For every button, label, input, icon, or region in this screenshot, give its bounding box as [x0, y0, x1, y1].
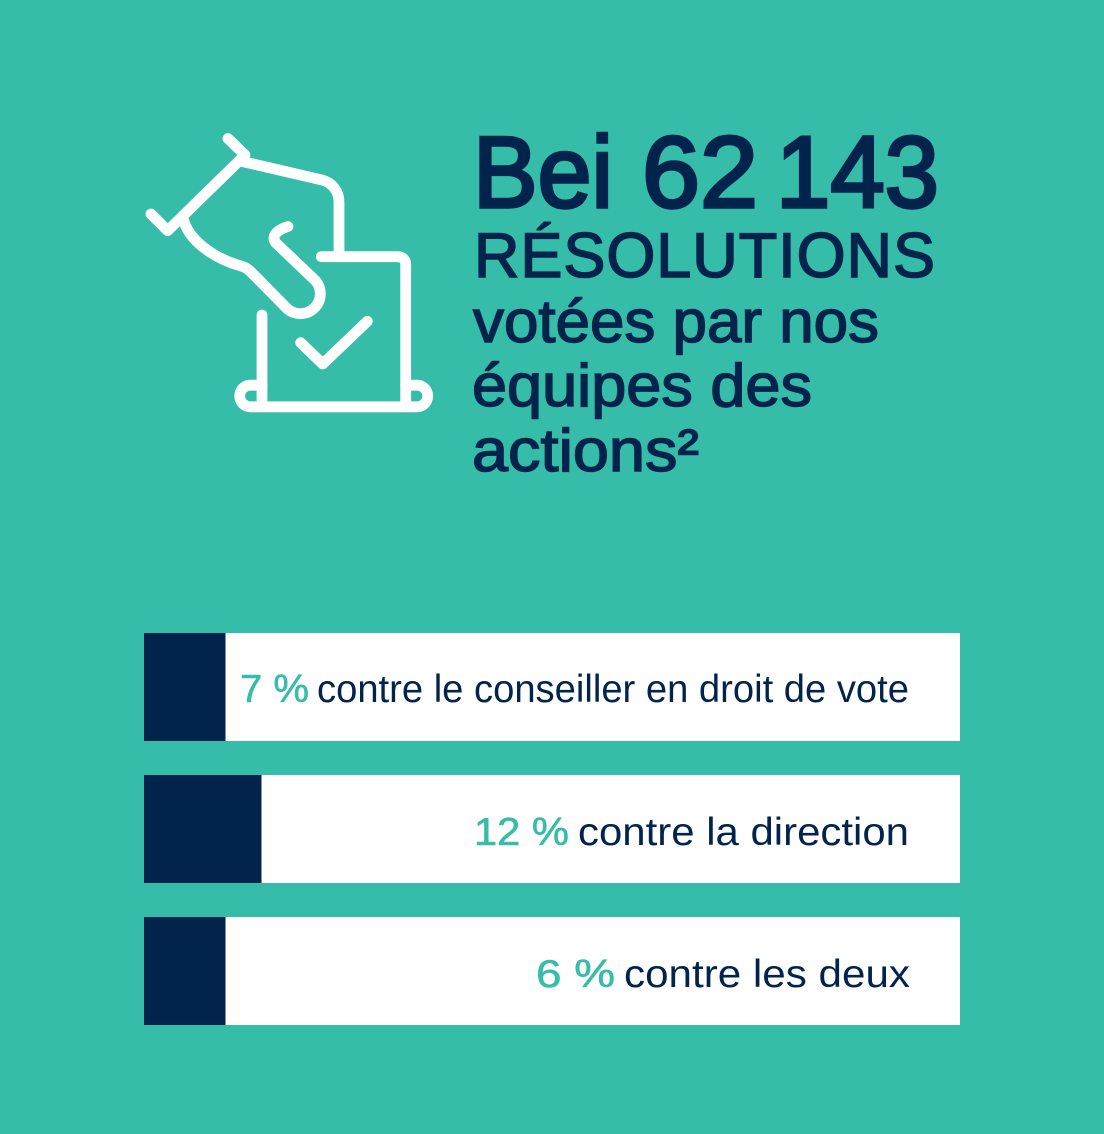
- label: 12 %: 12 %: [474, 811, 569, 854]
- label: contre le conseiller en droit de vote: contre le conseiller en droit de vote: [317, 668, 909, 711]
- bar: 6 % against both: [144, 917, 960, 1025]
- label: contre la direction: contre la direction: [578, 811, 909, 854]
- heading: key figure: [473, 117, 939, 229]
- label: 7 %: 7 %: [240, 668, 309, 711]
- heading: description line 1: votées par nos: [473, 288, 879, 355]
- icon: check mark: [301, 321, 367, 364]
- heading: description line 2: équipes des: [472, 352, 812, 419]
- heading: key figure: 143: [776, 117, 939, 229]
- heading: key figure: Bei: [473, 117, 613, 229]
- bar: 12 % against management: [144, 775, 960, 883]
- label: 6 %: 6 %: [536, 953, 615, 996]
- heading: key figure: 62: [642, 117, 758, 229]
- label: contre les deux: contre les deux: [624, 953, 911, 996]
- icon: hand casting a vote into a ballot box: [151, 138, 428, 407]
- icon: ballot box: [240, 257, 428, 407]
- bar: 7 % against the proxy adviser: [144, 633, 960, 741]
- icon: hand and cuff: [151, 138, 339, 314]
- heading: description line 3: actions²: [472, 417, 699, 484]
- heading: résolutions: RÉSOLUTIONS: [474, 221, 935, 291]
- heading: [472, 117, 939, 484]
